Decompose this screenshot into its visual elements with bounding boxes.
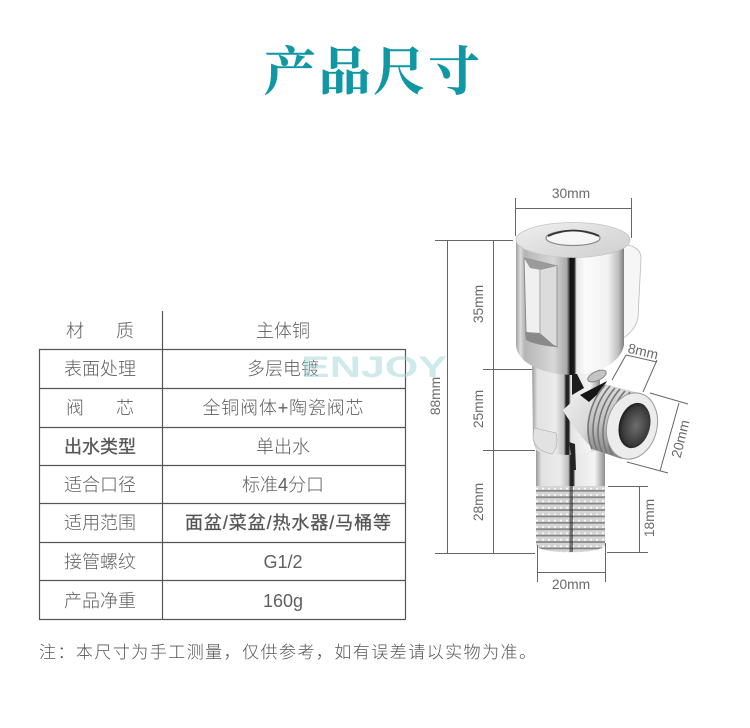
dimension: 8mm outlet length: 8mm (626, 341, 660, 362)
dimension: 25mm body height (471, 369, 535, 450)
dimension: 30mm top width: 30mm (552, 186, 590, 201)
dimension: 88mm total height (428, 240, 535, 554)
row: thread: 接管螺纹 (64, 552, 136, 572)
row: surface treatment (64, 359, 319, 379)
row: net weight: 产品净重 (64, 591, 136, 611)
row: surface treatment: 表面处理 (64, 359, 136, 379)
row: application (64, 513, 391, 533)
dimension: 30mm top width (515, 186, 632, 238)
outlet thread (588, 384, 639, 459)
dimension: 88mm total height: 88mm (428, 377, 443, 415)
dimension: 20mm outlet diameter: 20mm (669, 418, 693, 459)
row: port diameter (64, 475, 324, 495)
row: material: 主体铜 (256, 321, 310, 341)
outlet mouth (600, 387, 664, 465)
row: port diameter: 适合口径 (64, 475, 136, 495)
row: port diameter: 标准4分口 (242, 475, 324, 495)
watermark: ENJOY: ENJOY (301, 351, 447, 384)
row: application: 面盆/菜盆/热水器/马桶等 (185, 513, 391, 533)
valve middle body (532, 360, 600, 455)
row: net weight: 160g (263, 591, 303, 611)
dimension: 25mm body height: 25mm (471, 390, 486, 428)
row: application: 适用范围 (64, 513, 136, 533)
dimension: 18mm thread length (607, 486, 657, 552)
row: material (66, 321, 310, 341)
specification table (39, 311, 406, 620)
dimension: 20mm thread diameter: 20mm (552, 577, 590, 592)
row: net weight (64, 591, 303, 611)
dark reflections (580, 381, 607, 402)
hex nut (586, 368, 608, 384)
dimension: 20mm outlet diameter (627, 393, 693, 473)
valve head (516, 222, 630, 375)
dimension: 28mm lower height: 28mm (471, 483, 486, 521)
valve handle tab (620, 244, 641, 340)
dimension: 18mm thread length: 18mm (642, 499, 657, 537)
footnote: 注：本尺寸为手工测量，仅供参考，如有误差请以实物为准。 (39, 643, 536, 662)
outlet junction (563, 385, 606, 450)
row: thread (64, 552, 303, 572)
valve side outlet (563, 368, 664, 470)
dimension: 35mm head height: 35mm (471, 285, 486, 323)
dimension: 35mm head height (471, 240, 532, 370)
dimension: 20mm thread diameter (537, 543, 606, 592)
row: material: 材 质 (66, 321, 134, 341)
title: 产品尺寸 (264, 44, 480, 102)
dimension: 8mm outlet length (612, 341, 660, 392)
product photo: angle valve (516, 222, 664, 552)
row: surface treatment: 多层电镀 (247, 359, 319, 379)
row: valve core: 全铜阀体+陶瓷阀芯 (202, 398, 364, 418)
valve lower threaded tube (536, 448, 605, 552)
dimension: 28mm lower height (471, 450, 494, 553)
row: valve core (66, 398, 364, 418)
row: valve core: 阀 芯 (66, 398, 134, 418)
row: outlet type (64, 437, 310, 457)
row: outlet type: 出水类型 (64, 437, 136, 457)
table grid (39, 311, 406, 620)
row: outlet type: 单出水 (256, 437, 310, 457)
row: thread: G1/2 (263, 552, 303, 572)
